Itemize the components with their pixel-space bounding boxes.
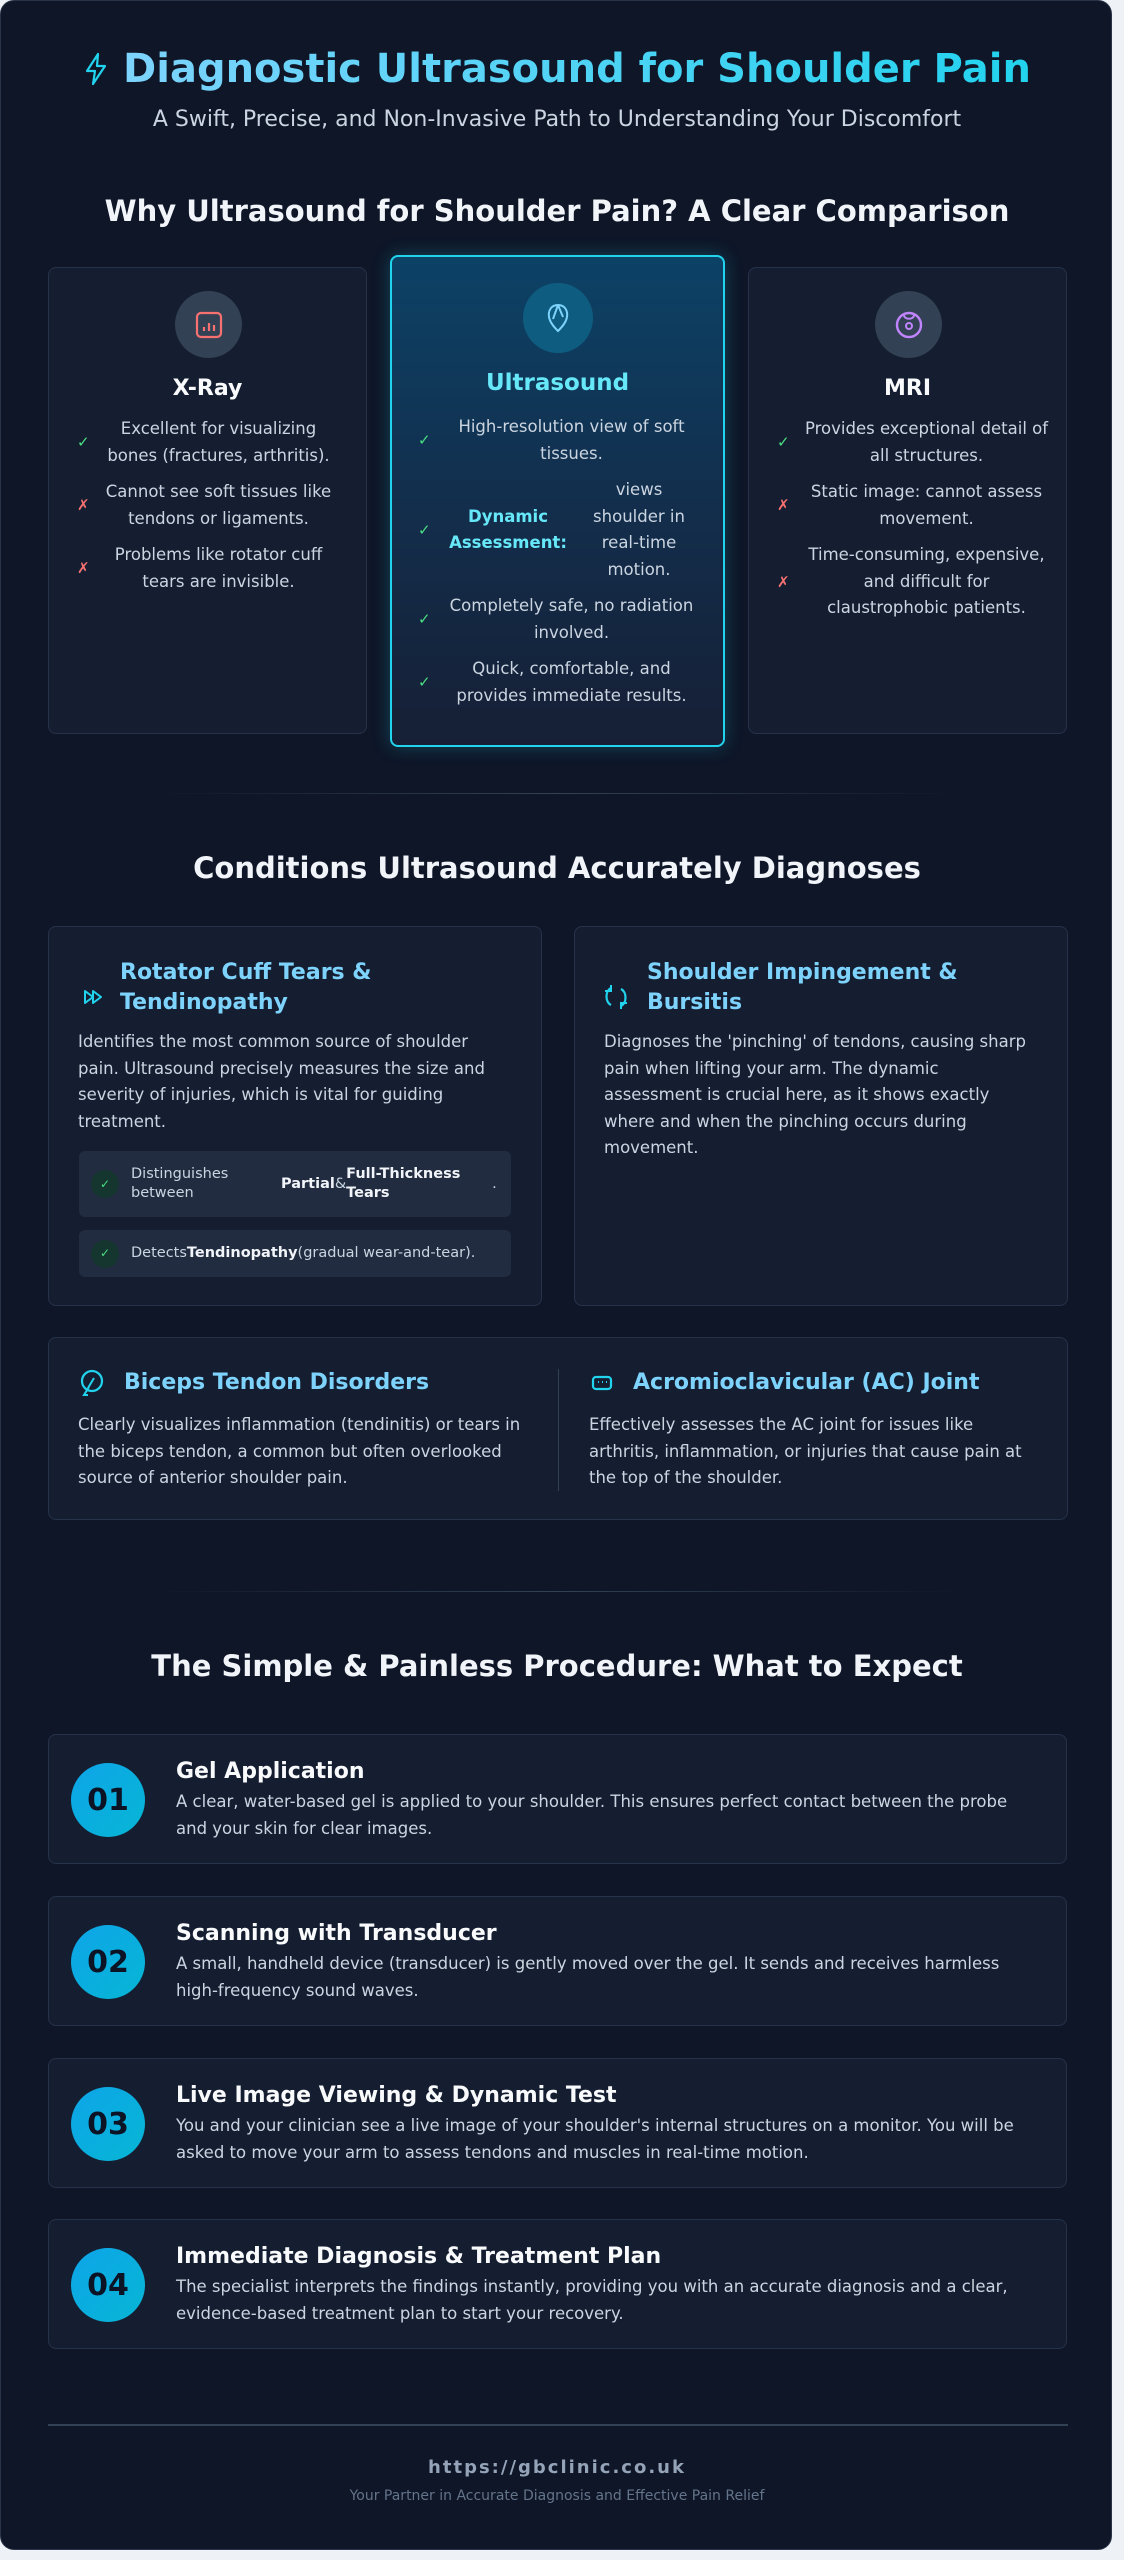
footer — [350, 2457, 765, 2504]
heading: rotator cuff — [120, 960, 372, 1014]
list: x-ray points: Excellent for visualizing bones (fractures, arthritis). — [107, 419, 330, 464]
step 2: Scanning with Transducer — [176, 1921, 497, 1946]
list: ultrasound points: Quick, comfortable, and provides immediate results. — [456, 659, 687, 704]
subtitle: A Swift, Precise, and Non-Invasive Path to Understanding Your Discomfort — [153, 107, 961, 132]
callout: tendinopathy: Detects — [131, 1245, 187, 1261]
icon: biceps — [80, 1370, 104, 1396]
heading: procedure: The Simple & Painless Procedure: What to Expect — [151, 1649, 963, 1683]
callout: partial vs full: . — [492, 1176, 497, 1192]
list: ultrasound points: Completely safe, no radiation involved. — [450, 596, 693, 642]
step 1: Gel Application — [176, 1759, 365, 1784]
callout: partial vs full: & — [335, 1176, 346, 1192]
list: MRI points: ✓ — [777, 433, 790, 451]
text: rotator cuff: Identifies the most common source of shoulder pain. Ultrasound precisely measures the size and severity of injuries, which is vital for guiding treatment. — [78, 1032, 485, 1130]
icon: lightning — [86, 52, 106, 86]
list: MRI points — [777, 419, 1048, 617]
step 1: 01 — [87, 1782, 129, 1818]
list: MRI points: ✗ — [777, 496, 790, 514]
list: MRI points: Provides exceptional detail of all structures. — [805, 419, 1048, 464]
heading: Ultrasound: Ultrasound — [486, 370, 629, 396]
list: ultrasound points: ✓ — [418, 521, 431, 539]
heading: conditions: Conditions Ultrasound Accurately Diagnoses — [193, 851, 921, 885]
callout: partial vs full: Distinguishes between — [131, 1166, 228, 1201]
step 4: 04 — [87, 2268, 129, 2302]
list: MRI points: and difficult for — [864, 572, 989, 590]
callout: tendinopathy: ✓ — [100, 1246, 110, 1260]
text: impingement: Diagnoses the 'pinching' of tendons, causing sharp pain when lifting your arm. The dynamic assessment is crucial here, as it shows exactly where and when the pinching occurs during movement. — [604, 1032, 1026, 1157]
callout: tendinopathy: (gradual wear-and-tear). — [298, 1245, 475, 1261]
panel: Ultrasound — [390, 255, 725, 747]
heading: MRI: MRI — [884, 376, 931, 401]
panel: biceps and AC — [48, 1337, 1068, 1520]
step 4: Immediate Diagnosis & Treatment Plan — [176, 2244, 661, 2269]
icon: fast-forward — [84, 990, 102, 1004]
list: ultrasound points: ✓ — [418, 610, 431, 628]
list: MRI points: ✗ — [777, 572, 790, 590]
list: x-ray points: Problems like rotator cuff tears are invisible. — [115, 545, 322, 590]
list: x-ray points: ✗ — [77, 559, 90, 577]
callout: partial vs full — [79, 1151, 511, 1217]
heading: rotator cuff: Rotator Cuff Tears & — [120, 960, 372, 985]
step 4: The specialist interprets the findings instantly, providing you with an accurate diagnosis and a clear, evidence-based treatment plan to start your recovery. — [176, 2277, 1008, 2323]
heading: impingement — [647, 960, 958, 1014]
panel: rotator cuff — [48, 926, 542, 1306]
list: x-ray points: Cannot see soft tissues like tendons or ligaments. — [106, 482, 331, 528]
step 3 — [48, 2058, 1067, 2188]
footer: Your Partner in Accurate Diagnosis and Effective Pain Relief — [350, 2488, 764, 2504]
callout: partial vs full: Full-Thickness Tears — [346, 1166, 460, 1201]
list: MRI points: Time-consuming, expensive, — [808, 545, 1045, 564]
heading: biceps: Biceps Tendon Disorders — [124, 1370, 429, 1395]
callout: partial vs full: ✓ — [100, 1176, 110, 1190]
list: ultrasound points: ✓ — [418, 673, 431, 691]
list: x-ray points: ✓ — [77, 433, 90, 451]
panel: MRI — [748, 267, 1067, 734]
heading: impingement: Bursitis — [647, 990, 742, 1014]
heading: impingement: Shoulder Impingement & — [647, 960, 958, 985]
heading: AC joint: Acromioclavicular (AC) Joint — [633, 1370, 979, 1395]
list: MRI points: claustrophobic patients. — [827, 598, 1026, 617]
list: ultrasound points — [418, 417, 693, 704]
icon: AC joint — [592, 1376, 612, 1390]
heading: rotator cuff: Tendinopathy — [120, 990, 288, 1014]
callout: tendinopathy — [79, 1230, 511, 1277]
list: ultrasound points: views shoulder in real-time motion. — [593, 480, 685, 578]
icon: refresh — [605, 985, 627, 1009]
callout: tendinopathy: Tendinopathy — [187, 1245, 298, 1261]
callout: partial vs full: Partial — [281, 1176, 335, 1192]
list: MRI points: Static image: cannot assess movement. — [811, 482, 1042, 528]
list: ultrasound points: ✓ — [418, 431, 431, 449]
step 2 — [48, 1896, 1067, 2026]
icon: ultrasound — [523, 283, 593, 353]
list: x-ray points — [77, 419, 331, 590]
list: ultrasound points: High-resolution view of soft tissues. — [458, 417, 685, 462]
panel: impingement — [574, 926, 1068, 1306]
step 1 — [48, 1734, 1067, 1864]
heading: comparison: Why Ultrasound for Shoulder Pain? A Clear Comparison — [105, 194, 1009, 228]
text: AC joint: Effectively assesses the AC joint for issues like arthritis, inflammation, or injuries that cause pain at the top of the shoulder. — [589, 1415, 1022, 1487]
step 1: A clear, water-based gel is applied to your shoulder. This ensures perfect contact between the probe and your skin for clear images. — [176, 1792, 1007, 1838]
list: ultrasound points: Dynamic Assessment: — [449, 506, 567, 552]
footer: https://gbclinic.co.uk — [428, 2457, 686, 2478]
heading: X-Ray: X-Ray — [173, 376, 242, 401]
step 3: You and your clinician see a live image of your shoulder's internal structures on a monitor. You will be asked to move your arm to assess tendons and muscles in real-time motion. — [176, 2116, 1014, 2162]
panel: X-Ray — [48, 267, 367, 734]
list: x-ray points: ✗ — [77, 496, 90, 514]
step 2: 02 — [87, 1944, 129, 1980]
step 3: 03 — [87, 2106, 129, 2142]
title: Diagnostic Ultrasound for Shoulder Pain — [123, 46, 1031, 92]
text: biceps: Clearly visualizes inflammation (tendinitis) or tears in the biceps tendon, a common but often overlooked source of anterior shoulder pain. — [78, 1415, 520, 1487]
step 3: Live Image Viewing & Dynamic Test — [176, 2083, 617, 2108]
step 2: A small, handheld device (transducer) is gently moved over the gel. It sends and receives harmless high-frequency sound waves. — [176, 1954, 999, 2000]
icon: x-ray — [175, 291, 242, 358]
icon: MRI — [875, 291, 942, 358]
step 4 — [48, 2219, 1067, 2349]
